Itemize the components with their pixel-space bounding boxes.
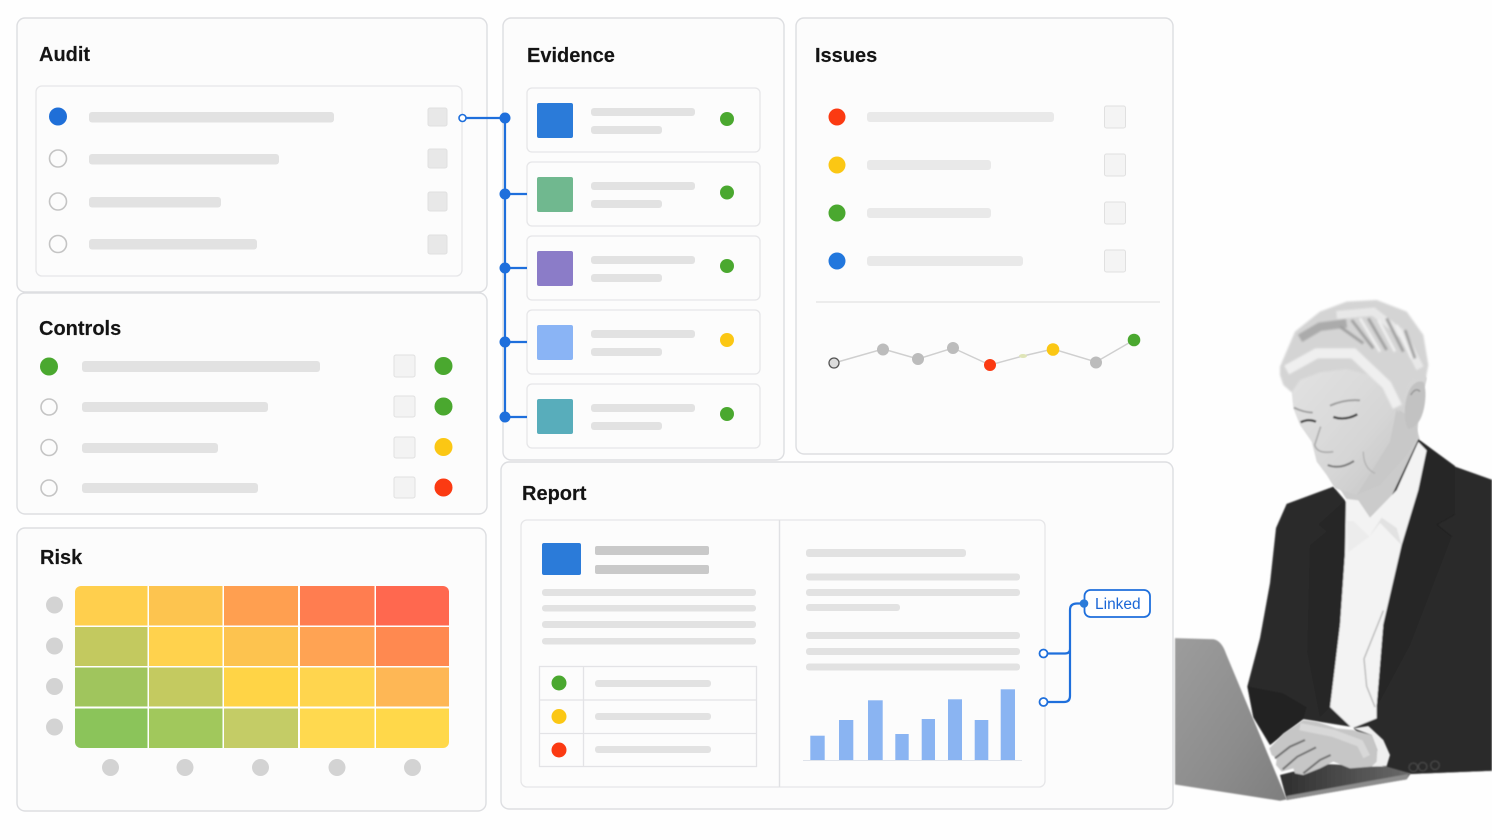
- panel: evidence: [503, 18, 784, 460]
- cheek lines: [1363, 452, 1375, 473]
- audit checklist card: [36, 86, 462, 276]
- eyes and brows: [1294, 400, 1360, 413]
- head: [1280, 300, 1428, 495]
- right lapel: [1377, 439, 1455, 707]
- heading: risk: Risk: [40, 547, 83, 569]
- connector: audit to evidence: [459, 112, 527, 422]
- panel: risk: [17, 528, 486, 811]
- left lapel: [1307, 500, 1345, 717]
- report left page: [540, 543, 756, 766]
- evidence card 4: [527, 310, 760, 374]
- report bar chart: [803, 689, 1022, 760]
- issues list: [816, 106, 1160, 302]
- evidence card 2: [527, 162, 760, 226]
- panel: audit: [17, 18, 487, 292]
- heading: issues: Issues: [815, 45, 877, 67]
- report document: [521, 520, 1045, 787]
- evidence card 5: [527, 384, 760, 448]
- ear: [1405, 381, 1426, 429]
- tag: linked: [1080, 590, 1150, 617]
- jaw shadow: [1357, 408, 1417, 495]
- nose: [1315, 427, 1333, 452]
- mouth: [1328, 461, 1354, 467]
- evidence card 3: [527, 236, 760, 300]
- laptop lid: [1175, 638, 1287, 801]
- jacket buttons: [1409, 761, 1439, 772]
- heading: audit: Audit: [39, 44, 90, 66]
- controls rows: [40, 355, 452, 498]
- face: [1283, 328, 1427, 495]
- neck: [1337, 428, 1423, 528]
- connector: report to linked tag: [1040, 604, 1084, 706]
- hair: [1280, 300, 1428, 412]
- photo: woman working on laptop: [1175, 300, 1492, 801]
- panel: controls: [17, 293, 487, 514]
- hands and laptop base: [1269, 720, 1439, 800]
- heading: evidence: Evidence: [527, 45, 615, 67]
- shirt cuff: [1353, 726, 1390, 767]
- laptop base: [1280, 764, 1411, 800]
- torso: [1247, 428, 1492, 774]
- report right page text: [806, 549, 1020, 670]
- left sleeve shadow: [1247, 686, 1307, 745]
- hand: [1269, 720, 1377, 775]
- heading: report: Report: [522, 483, 587, 505]
- shirt: [1330, 442, 1427, 728]
- tag: linked: Linked: [1095, 596, 1141, 613]
- issues trend line chart: [829, 334, 1140, 371]
- panel: issues: [796, 18, 1173, 454]
- heading: controls: Controls: [39, 318, 121, 340]
- jacket body: [1247, 439, 1492, 774]
- right sleeve: [1353, 669, 1492, 774]
- risk axis markers: [46, 596, 421, 776]
- evidence card 1: [527, 88, 760, 152]
- risk heatmap: [75, 586, 449, 748]
- panel: report: [501, 462, 1173, 809]
